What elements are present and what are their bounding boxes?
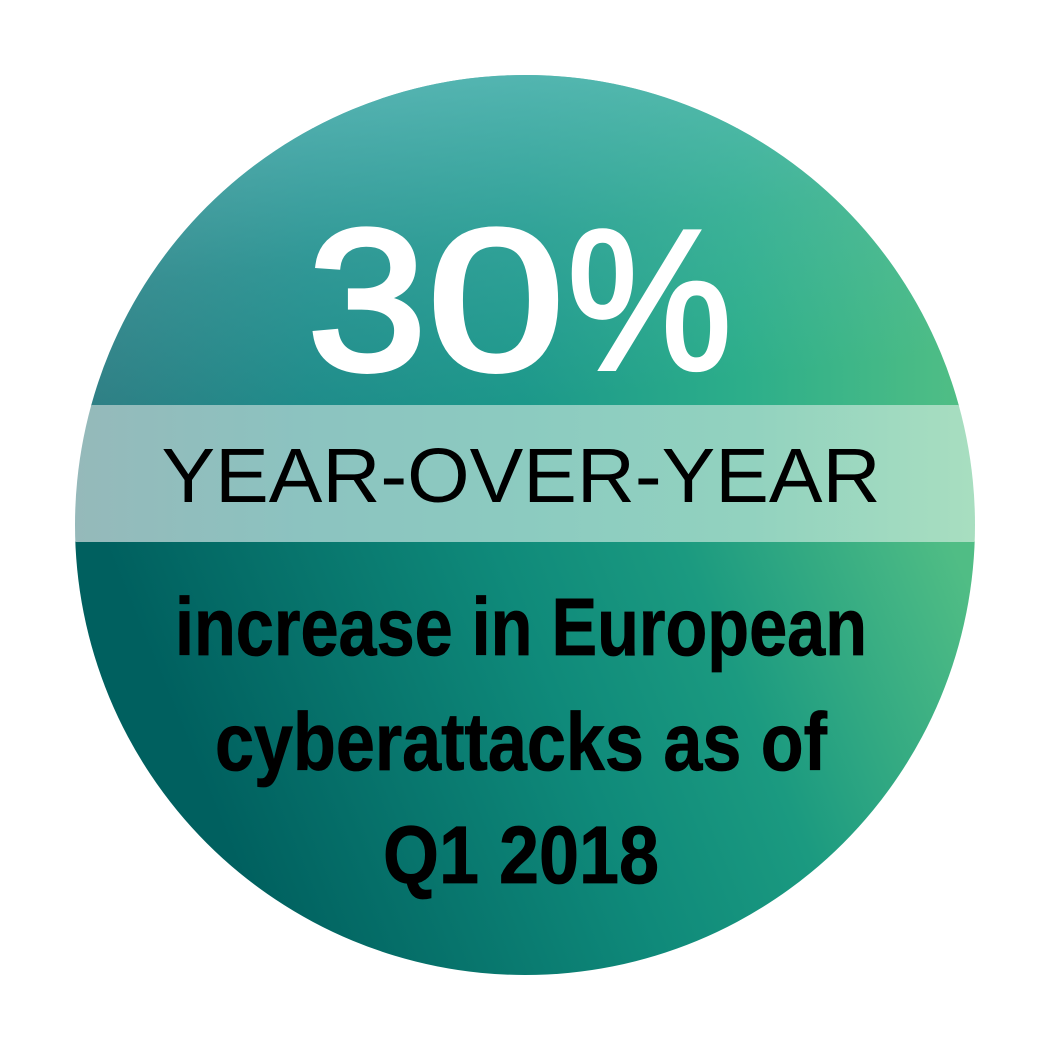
headline: 30%: 3 xyxy=(308,189,426,412)
headline: 30%: % xyxy=(567,189,732,412)
description text: cyberattacks as of xyxy=(215,697,828,788)
infographic badge xyxy=(75,75,975,975)
description text: increase in European xyxy=(175,582,867,673)
description text: Q1 2018 xyxy=(383,810,659,901)
description text xyxy=(175,582,867,901)
headline: 30% xyxy=(308,189,732,412)
band label: YEAR-OVER-YEAR xyxy=(162,433,880,519)
headline: 30%: 0 xyxy=(428,189,564,412)
translucent band xyxy=(75,405,975,542)
circle background xyxy=(75,75,975,975)
